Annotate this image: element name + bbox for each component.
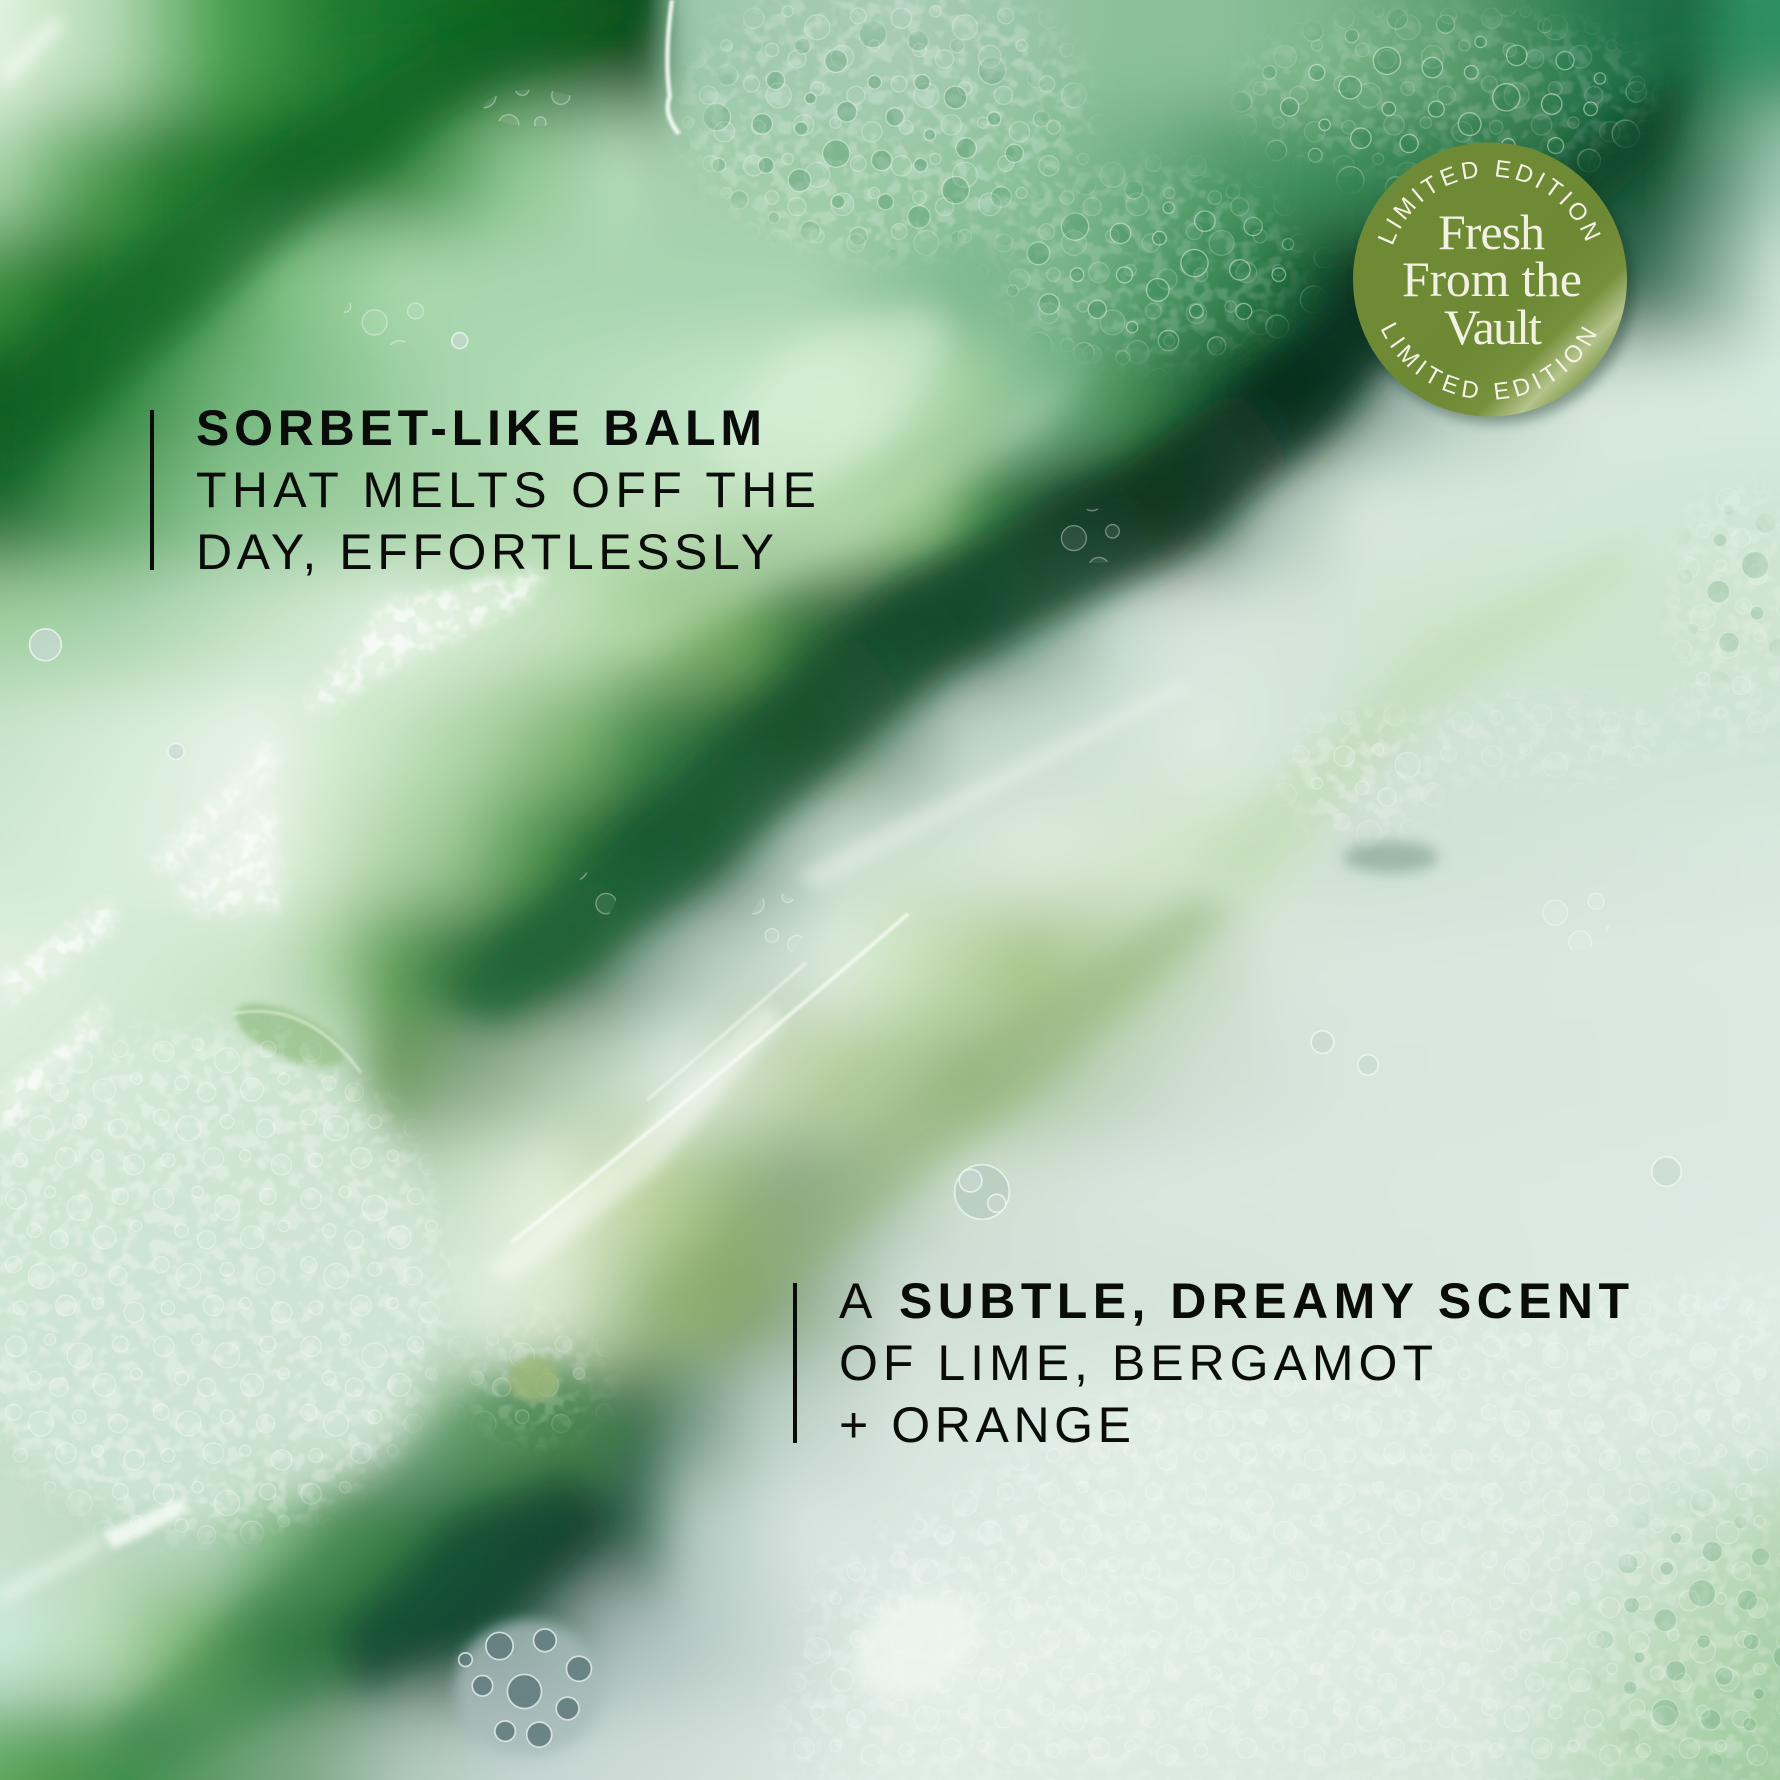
lower-left dark band bbox=[102, 1362, 636, 1771]
badge: limited edition sticker bbox=[1353, 142, 1638, 430]
top-left dark band bbox=[0, 0, 670, 488]
shadow under right foam bbox=[1343, 841, 1438, 873]
badge: limited edition sticker: LIMITED EDITION bbox=[1378, 160, 1601, 244]
callout: sorbet-like balm: SORBET-LIKE BALM bbox=[196, 400, 762, 456]
callout: subtle dreamy scent: + ORANGE bbox=[839, 1397, 1131, 1453]
badge: limited edition sticker: Vault bbox=[1444, 299, 1542, 355]
foam sphere rim bbox=[226, 991, 361, 1080]
main diagonal band bbox=[443, 68, 1691, 1022]
specular streaks bbox=[0, 0, 1192, 1606]
badge: limited edition sticker: From the bbox=[1402, 251, 1582, 307]
callout: sorbet-like balm: THAT MELTS OFF THE bbox=[196, 462, 816, 518]
green foam bubbles bbox=[702, 7, 1780, 1765]
callout: sorbet-like balm: DAY, EFFORTLESSLY bbox=[196, 524, 774, 580]
speckled highlights bbox=[0, 566, 548, 1129]
badge: limited edition sticker: LIMITED EDITION bbox=[1381, 322, 1597, 400]
pale olive ridge bbox=[636, 545, 1635, 1351]
callout: subtle dreamy scent: A bbox=[839, 1273, 873, 1329]
callout: subtle dreamy scent: OF LIME, BERGAMOT bbox=[839, 1335, 1433, 1391]
callout: sorbet-like balm bbox=[150, 400, 816, 580]
callout: subtle dreamy scent bbox=[793, 1273, 1629, 1453]
badge: limited edition sticker: Fresh bbox=[1438, 204, 1545, 260]
foam sphere body bbox=[0, 1033, 437, 1521]
callout: subtle dreamy scent: SUBTLE, DREAMY SCENT bbox=[899, 1273, 1629, 1329]
